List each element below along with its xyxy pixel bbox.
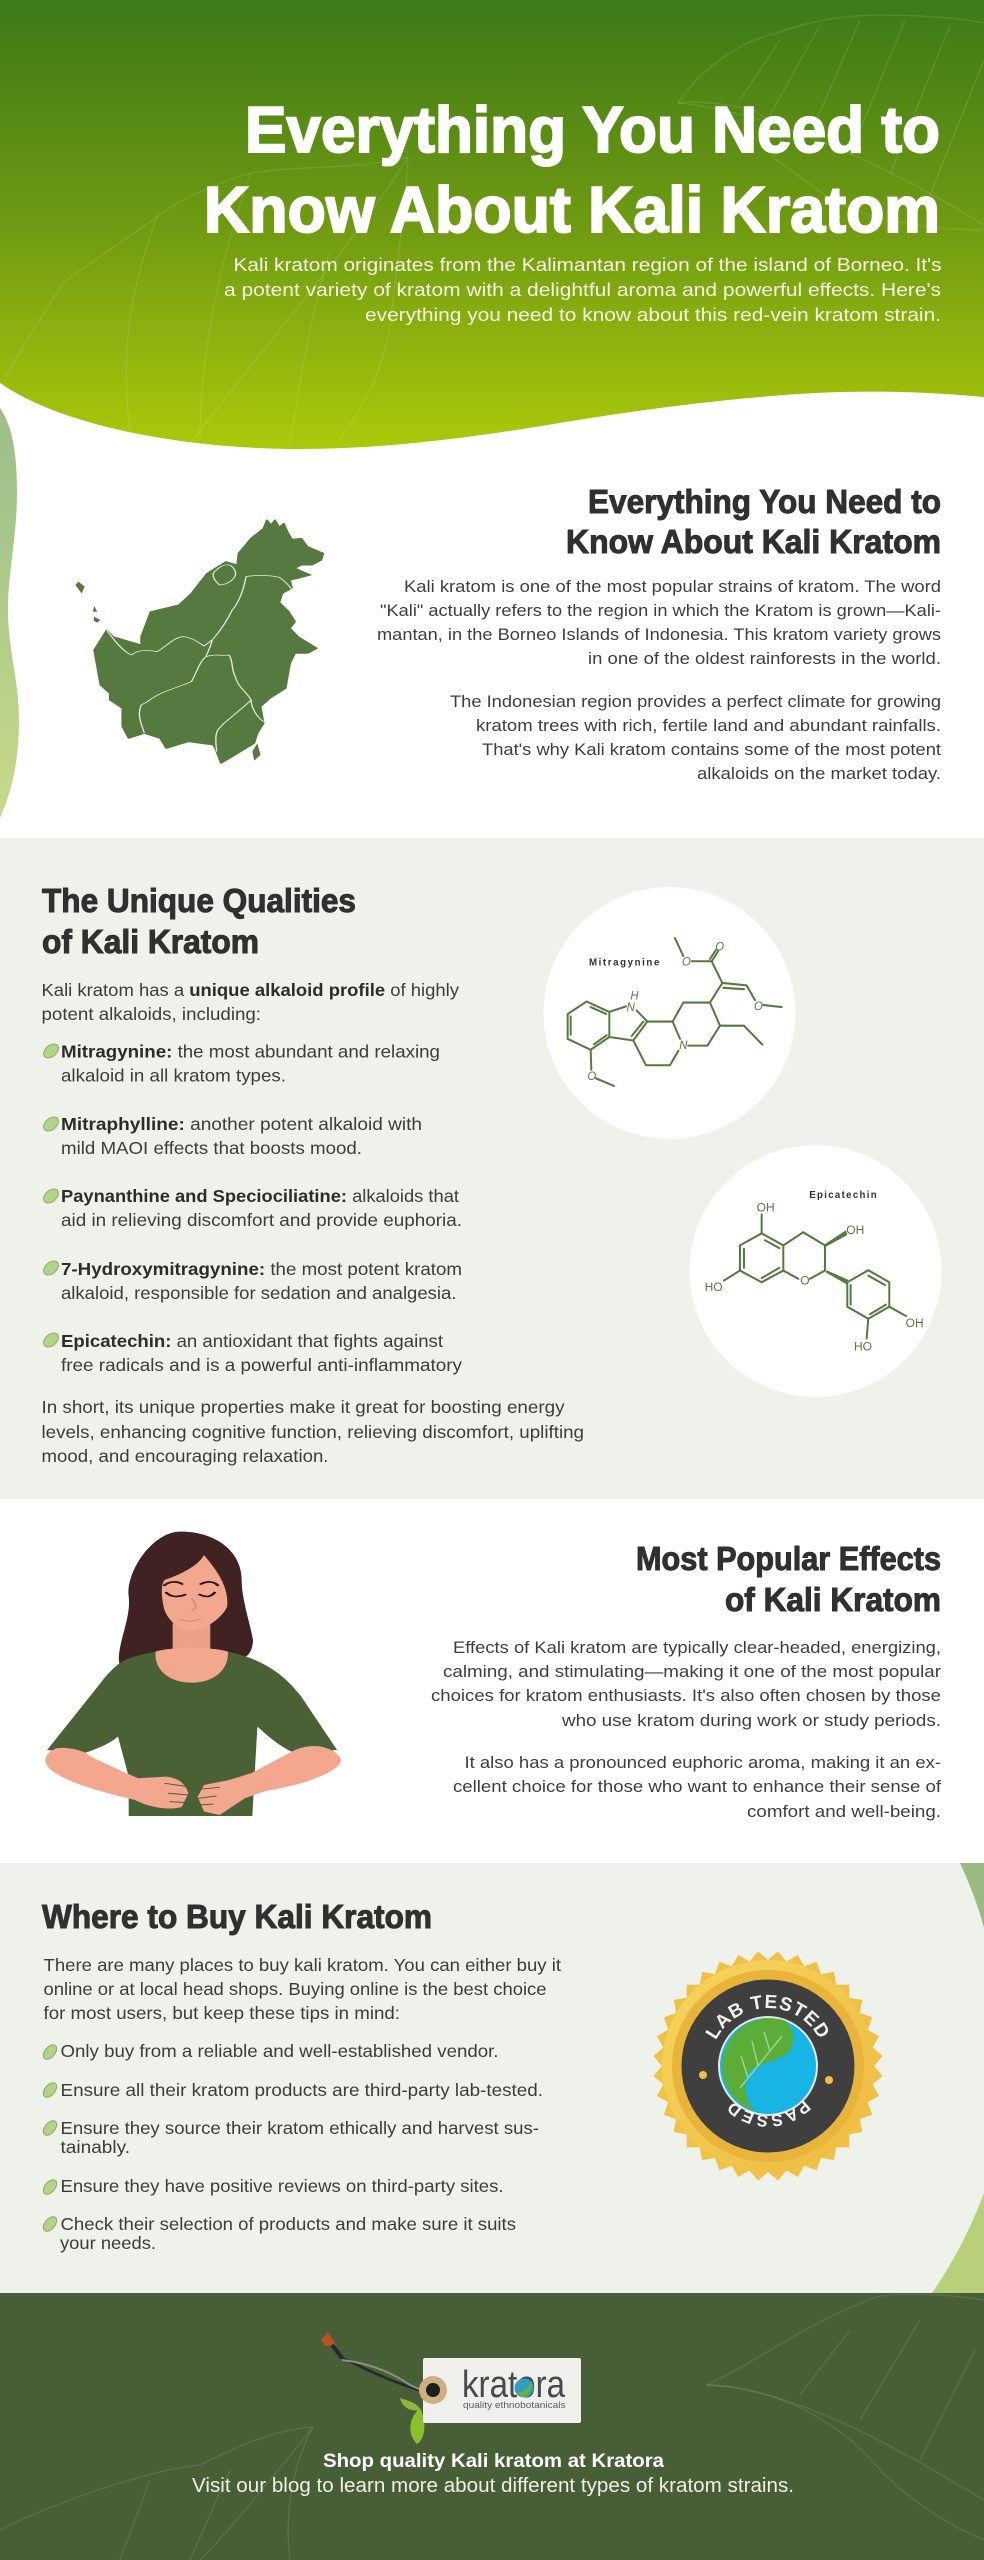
item: Mitragynine: Mitragynine: the most abundant and relaxing [61, 1042, 440, 1062]
tip: product selection: your needs. [60, 2233, 156, 2253]
section background [0, 1863, 984, 2293]
footer text: Visit our blog to learn more about different types of kratom strains. [192, 2475, 794, 2497]
badge: lab tested passed: LAB TESTED [705, 1994, 828, 2040]
cord [342, 2358, 428, 2393]
intro text: Kali kratom has a unique alkaloid profile of highly [42, 980, 459, 1000]
hero green gradient wave [0, 0, 984, 449]
item: Epicatechin: Epicatechin: an antioxidant that fights against [61, 1331, 443, 1351]
body text: The Indonesian region provides a perfect climate for growing [450, 692, 941, 711]
footer background [0, 2293, 984, 2560]
tip: ethical sourcing: tainably. [60, 2137, 130, 2157]
diagram: Mitragynine molecule: N [627, 1002, 636, 1014]
logo: kratora tag: quality ethnobotanicals [463, 2400, 566, 2411]
diagram: Epicatechin molecule: OH [906, 1316, 924, 1330]
body text: choices for kratom enthusiasts. It's also often chosen by those [431, 1686, 941, 1705]
tip: positive reviews: Ensure they have positive reviews on third-party sites. [60, 2176, 504, 2196]
diagram: Mitragynine molecule: O [715, 941, 724, 954]
map of Borneo [75, 520, 323, 763]
diagram: Mitragynine molecule: N [679, 1040, 688, 1052]
hero title: Everything You Need to [245, 93, 940, 166]
panel: where to buy [0, 1863, 984, 2293]
item: 7-Hydroxymitragynine [41, 1258, 462, 1303]
item: Paynanthine and Speciociliatine [41, 1186, 462, 1230]
tip: ethical sourcing: Ensure they source their kratom ethically and harvest sus- [60, 2118, 539, 2138]
diagram: Mitragynine molecule: O [754, 1001, 763, 1013]
hero title: Know About Kali Kratom [204, 173, 940, 246]
diagram: Epicatechin molecule [690, 1145, 942, 1397]
body text: That's why Kali kratom contains some of the most potent [482, 740, 941, 759]
body text: It also has a pronounced euphoric aroma, making it an ex- [464, 1753, 941, 1772]
tip: reliable vendor: Only buy from a reliable and well-established vendor. [60, 2041, 498, 2061]
hero title [204, 93, 940, 246]
heading: The Unique Qualities [42, 882, 356, 919]
panel: origin of Kali kratom [0, 408, 941, 818]
heading [566, 483, 941, 560]
tip: product selection: Check their selection of products and make sure it suits [60, 2214, 516, 2234]
body text: in one of the oldest rainforests in the world. [588, 649, 941, 668]
right wave top [960, 1863, 984, 1928]
diagram: Mitragynine molecule: O [587, 1071, 596, 1083]
tip: lab-tested: Ensure all their kratom products are third-party lab-tested. [60, 2080, 543, 2100]
body text: mantan, in the Borneo Islands of Indonesia. This kratom variety grows [377, 625, 941, 644]
right wave bottom [932, 2193, 984, 2293]
item: 7-Hydroxymitragynine: alkaloid, responsible for sedation and analgesia. [61, 1283, 456, 1303]
illustration: woman with hands on stomach [45, 1532, 341, 1816]
item: Mitraphylline: Mitraphylline: another potent alkaloid with [61, 1114, 422, 1134]
diagram: Epicatechin molecule: HO [705, 1280, 723, 1294]
body text: Kali kratom is one of the most popular strains of kratom. The word [404, 577, 941, 596]
body text: "Kali" actually refers to the region in which the Kratom is grown—Kali- [380, 601, 941, 620]
heading: Where to Buy Kali Kratom [42, 1898, 432, 1935]
intro text [42, 980, 459, 1024]
badge: lab tested passed [654, 1952, 882, 2180]
item: Mitragynine [41, 1041, 440, 1086]
hero intro text: everything you need to know about this red-vein kratom strain. [365, 305, 941, 325]
diagram: Epicatechin molecule: O [800, 1273, 810, 1288]
panel: popular effects [45, 1532, 941, 1821]
closing text: levels, enhancing cognitive function, relieving discomfort, uplifting [42, 1422, 584, 1442]
item: 7-Hydroxymitragynine: 7-Hydroxymitragynine: the most potent kratom [61, 1259, 462, 1279]
body text: cellent choice for those who want to enhance their sense of [453, 1777, 941, 1796]
diagram: Epicatechin molecule: OH [846, 1223, 864, 1237]
body text: Effects of Kali kratom are typically clear-headed, energizing, [453, 1638, 941, 1657]
diagram: Epicatechin molecule: OH [757, 1200, 775, 1215]
body text: kratom trees with rich, fertile land and abundant rainfalls. [476, 716, 941, 735]
item: Paynanthine and Speciociliatine: aid in relieving discomfort and provide euphoria. [61, 1210, 462, 1230]
closing text: mood, and encouraging relaxation. [42, 1446, 328, 1466]
closing text [42, 1397, 584, 1466]
hero intro text: Kali kratom originates from the Kalimantan region of the island of Borneo. It's [234, 255, 942, 275]
logo: kratora tag: kratora [462, 2364, 566, 2406]
item: Mitraphylline: mild MAOI effects that boosts mood. [61, 1138, 362, 1158]
intro text: There are many places to buy kali kratom. You can either buy it [44, 1955, 561, 1975]
hero leaf outlines [6, 15, 984, 447]
closing text: In short, its unique properties make it great for boosting energy [42, 1397, 565, 1417]
footer leaf outlines [0, 2294, 984, 2560]
heading [42, 882, 356, 960]
panel: unique qualities [0, 838, 984, 1499]
body text: who use kratom during work or study periods. [561, 1711, 941, 1730]
diagram: Mitragynine molecule: O [682, 957, 691, 969]
item: Epicatechin [41, 1330, 462, 1375]
leaves [400, 2398, 420, 2410]
section background [0, 838, 984, 1499]
item: Epicatechin: free radicals and is a powerful anti-inflammatory [61, 1355, 462, 1375]
list: buying tips [41, 2041, 543, 2253]
tip: product selection [41, 2214, 516, 2253]
item: Paynanthine and Speciociliatine: Paynanthine and Speciociliatine: alkaloids that [61, 1186, 459, 1206]
tip: ethical sourcing [41, 2118, 539, 2157]
body text: alkaloids on the market today. [697, 764, 941, 783]
diagram: Epicatechin molecule: Epicatechin [809, 1190, 877, 1201]
hero intro text [224, 255, 942, 325]
heading [636, 1540, 941, 1618]
hero intro text: a potent variety of kratom with a delightful aroma and powerful effects. Here's [224, 280, 941, 300]
heading: of Kali Kratom [725, 1581, 941, 1618]
item: Mitraphylline [41, 1114, 422, 1158]
body text [377, 577, 941, 783]
diagram: Mitragynine molecule [544, 887, 796, 1139]
left decorative wave [0, 408, 19, 818]
heading: of Kali Kratom [42, 923, 259, 960]
list: alkaloids [41, 1041, 462, 1375]
tag body [423, 2358, 581, 2423]
diagram: Mitragynine molecule: Mitragynine [589, 958, 660, 969]
diagram: Mitragynine molecule: H [630, 990, 639, 1003]
heading: Most Popular Effects [636, 1540, 941, 1577]
body text: comfort and well-being. [747, 1802, 941, 1821]
intro text: online or at local head shops. Buying online is the best choice [44, 1979, 546, 1999]
footer text: Shop quality Kali kratom at Kratora [323, 2450, 664, 2472]
heading: Know About Kali Kratom [566, 523, 941, 560]
intro text [44, 1955, 561, 2023]
intro text: potent alkaloids, including: [42, 1004, 261, 1024]
panel: footer call to action [0, 2293, 984, 2560]
intro text: for most users, but keep these tips in mind: [44, 2003, 400, 2023]
item: Mitragynine: alkaloid in all kratom types. [61, 1066, 286, 1086]
body text: calming, and stimulating—making it one of the most popular [443, 1662, 941, 1681]
body text [431, 1638, 941, 1821]
badge: lab tested passed: PASSED [728, 2100, 811, 2127]
diagram: Epicatechin molecule: HO [854, 1339, 872, 1353]
logo: kratora tag [321, 2332, 581, 2444]
footer text [192, 2450, 794, 2497]
panel: hero header [0, 0, 984, 449]
heading: Everything You Need to [588, 483, 941, 520]
